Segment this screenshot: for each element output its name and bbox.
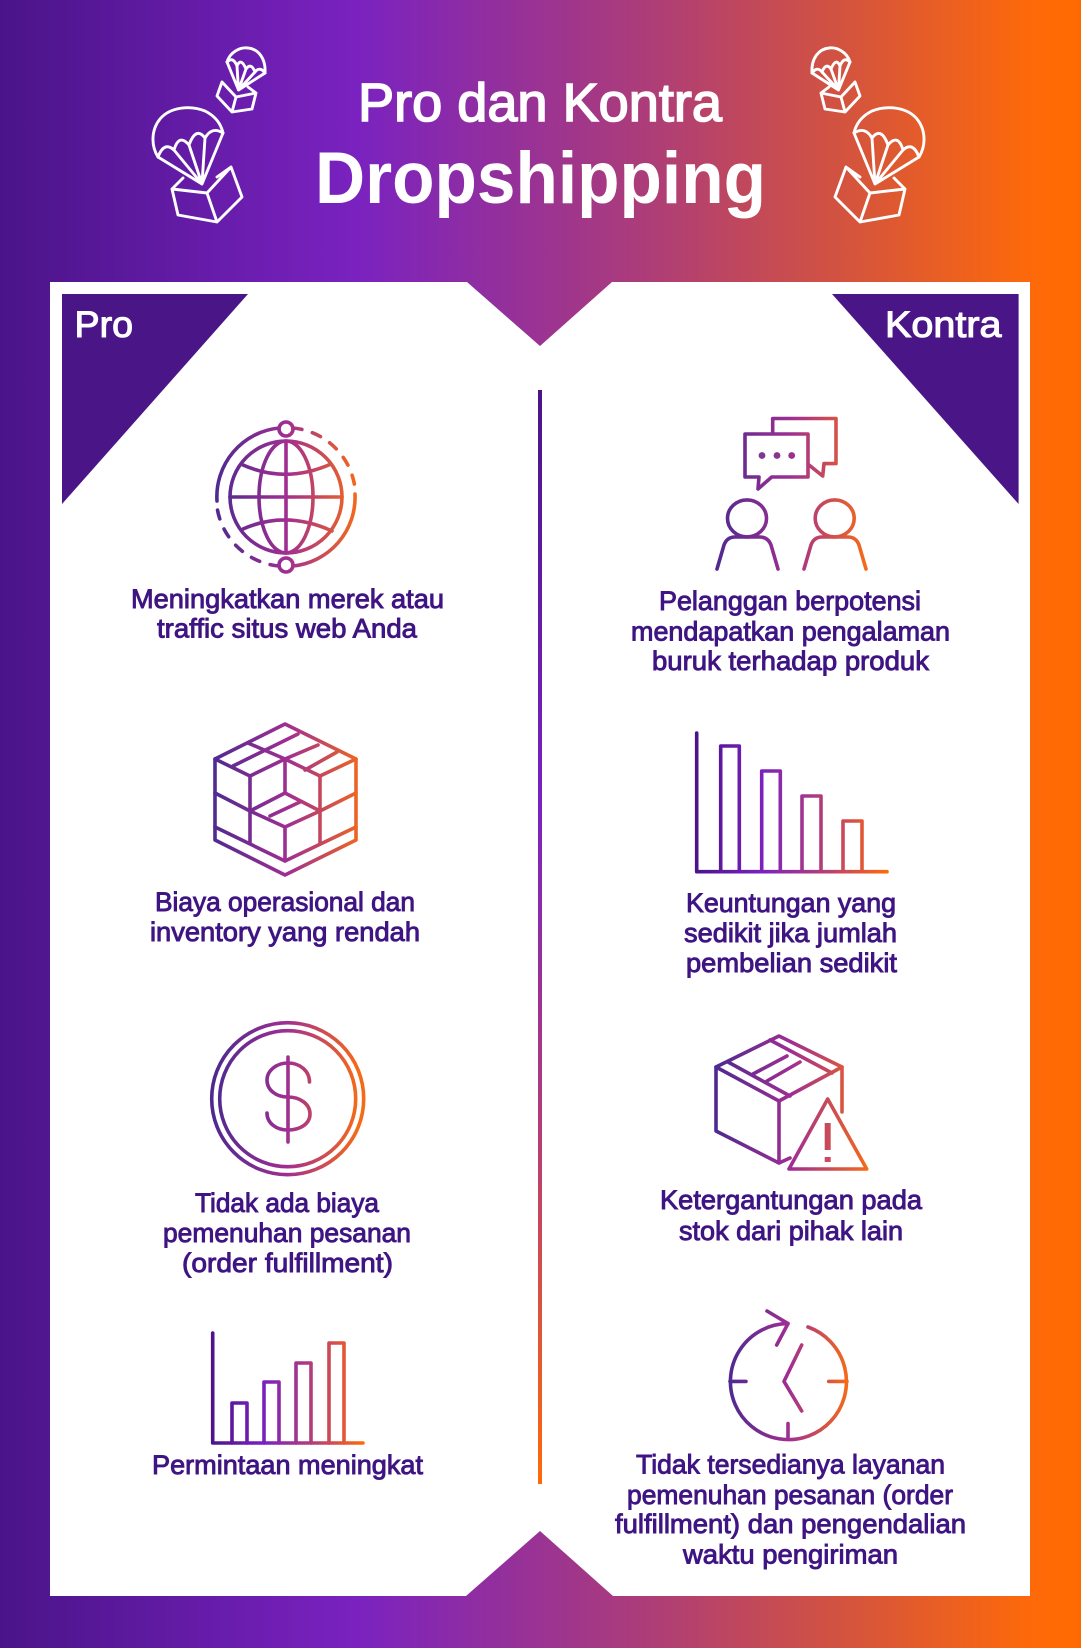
text: fulfillment: fulfillment) dan pengendalian — [615, 1509, 966, 1539]
icon: dollar coin — [212, 1023, 364, 1175]
text: ketergantungan: stok dari pihak lain — [679, 1216, 903, 1246]
panel: pro label — [62, 294, 248, 504]
text: fulfillment: waktu pengiriman — [682, 1540, 898, 1570]
text: pelanggan — [631, 586, 950, 676]
icon: parachute boxes right — [812, 48, 924, 222]
text: fulfillment: pemenuhan pesanan (order — [627, 1480, 953, 1510]
text: ketergantungan: Ketergantungan pada — [660, 1185, 922, 1215]
text: biaya — [150, 887, 420, 947]
text: fulfillment: Tidak tersedianya layanan — [636, 1450, 945, 1480]
center divider — [538, 390, 542, 1484]
text: pemenuhan: Tidak ada biaya — [195, 1188, 379, 1218]
text: pelanggan: mendapatkan pengalaman — [631, 616, 950, 646]
text: pemenuhan: pemenuhan pesanan — [163, 1218, 411, 1248]
text: merek — [131, 584, 444, 644]
icon: rising bars — [213, 1333, 363, 1443]
text: pelanggan: buruk terhadap produk — [652, 646, 930, 676]
text: biaya: inventory yang rendah — [150, 917, 420, 947]
text: merek: traffic situs web Anda — [157, 614, 417, 644]
text: merek: Meningkatkan merek atau — [131, 584, 444, 614]
text: keuntungan: sedikit jika jumlah — [684, 918, 897, 948]
title: Dropshipping — [315, 138, 766, 219]
icon: globe — [217, 422, 355, 572]
white panel with notches — [50, 282, 1030, 1596]
icon: box with warning — [716, 1036, 867, 1169]
panel: pro label: Pro — [74, 304, 133, 345]
text: ketergantungan — [660, 1185, 922, 1246]
text: fulfillment — [615, 1450, 966, 1570]
text: permintaan: Permintaan meningkat — [152, 1450, 424, 1480]
icon: clock — [730, 1311, 847, 1440]
text: pelanggan: Pelanggan berpotensi — [659, 586, 921, 616]
icon: falling bars — [697, 733, 887, 872]
text: pemenuhan — [163, 1188, 411, 1278]
text: keuntungan: pembelian sedikit — [686, 948, 898, 978]
text: keuntungan: Keuntungan yang — [686, 888, 896, 918]
panel: kontra label: Kontra — [885, 304, 1002, 345]
text: keuntungan — [684, 888, 898, 978]
text: pemenuhan: (order fulfillment) — [182, 1248, 393, 1278]
icon: parachute boxes left — [153, 48, 265, 222]
panel: kontra label — [832, 294, 1019, 504]
title — [315, 73, 766, 219]
icon: boxes — [215, 724, 356, 875]
title: Pro dan Kontra — [358, 73, 723, 133]
text: biaya: Biaya operasional dan — [155, 887, 415, 917]
icon: customers talking — [717, 418, 866, 569]
